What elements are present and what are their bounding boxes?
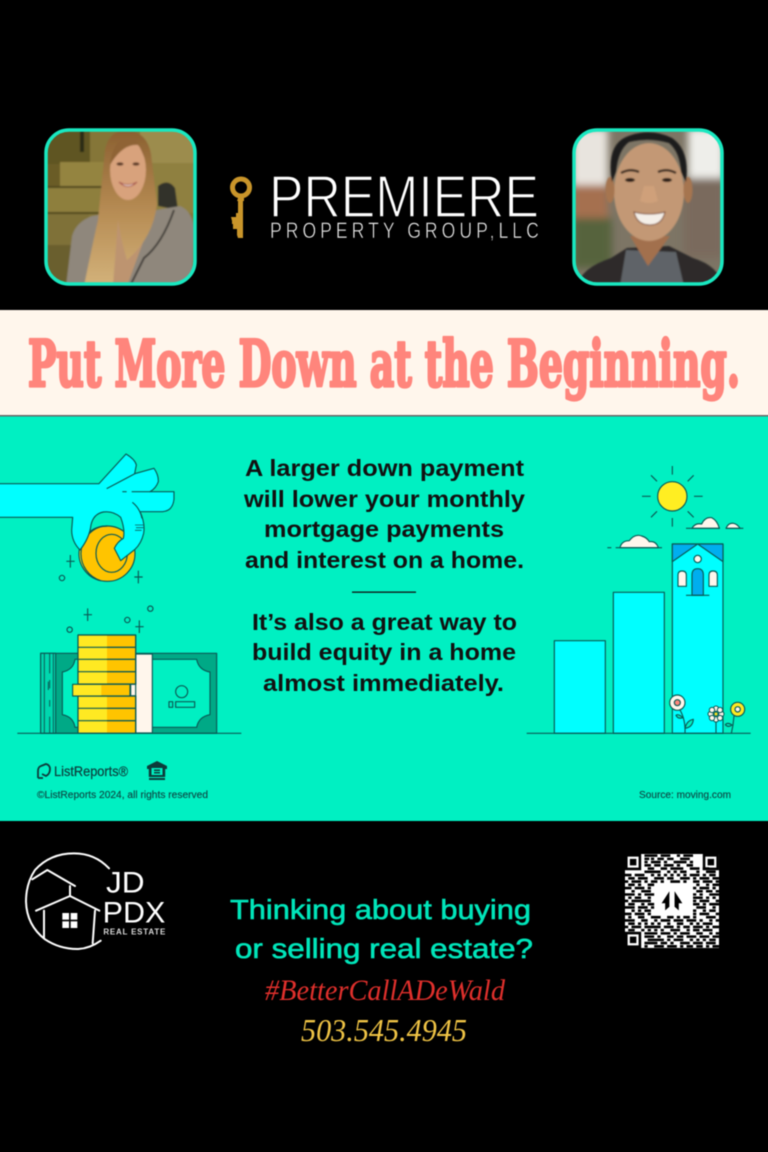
icon: gold coin [79, 526, 135, 581]
logo wordmark: PREMIERE: PREMIERE [269, 164, 539, 230]
body copy: down payment message: build equity in a home [252, 639, 516, 665]
QR code [625, 854, 719, 948]
photo: man agent [572, 128, 724, 286]
copyright line: ©ListReports 2024, all rights reserved [37, 790, 208, 801]
icon: clouds [607, 518, 743, 548]
wordmark: JD: JD [106, 867, 145, 900]
bar: medium [613, 592, 664, 733]
icon: flowers [670, 695, 745, 733]
body copy: down payment message: will lower your monthly [243, 486, 525, 512]
illustration: coin stack on dollar bill [17, 606, 241, 733]
illustration: hand dropping coin [0, 454, 174, 583]
white bill band [131, 654, 152, 733]
photo: woman agent [44, 128, 196, 287]
body copy: down payment message: It’s also a great way to [252, 609, 517, 635]
main teal panel [0, 416, 768, 821]
icon: equal housing logo [147, 761, 167, 780]
wordmark: Real Estate: REAL ESTATE [103, 927, 166, 936]
logo: JD PDX Real Estate [26, 853, 166, 949]
logo subtitle: Property Group, LLC: PROPERTY GROUP,LLC [270, 219, 539, 244]
icon: sun [642, 466, 703, 527]
hashtag: #BetterCallADeWald [265, 974, 506, 1007]
body copy: down payment message [243, 455, 525, 696]
bar: small [554, 641, 605, 733]
body copy: down payment message: and interest on a home. [245, 547, 524, 573]
body copy: down payment message: mortgage payments [264, 516, 504, 542]
title banner [0, 310, 768, 416]
icon: dollar bill [41, 653, 217, 733]
icon: QR center arrows [662, 891, 682, 910]
black header background [0, 0, 768, 310]
body copy: down payment message: A larger down payment [245, 455, 524, 481]
sparkles above stack [67, 606, 153, 633]
logo: Premiere Property Group [231, 164, 539, 244]
icon: ListReports mark [38, 764, 50, 778]
bar: tall house [672, 544, 723, 733]
body copy: down payment message: almost immediately. [263, 670, 504, 696]
icon: gold key [231, 179, 250, 238]
brand: ListReports logo: ListReports® [54, 763, 129, 779]
illustration: rising bars with house and sun [527, 466, 751, 733]
icon: house in circle [26, 853, 109, 949]
headline: thinking about buying or selling: or selling real estate? [235, 933, 533, 964]
gold coin stack [73, 635, 136, 733]
call to action text [230, 894, 533, 1048]
sparkles around coin [59, 555, 143, 583]
source line: Source: moving.com [639, 790, 731, 801]
phone number: 503.545.4945 [301, 1012, 467, 1048]
headline: thinking about buying or selling [230, 894, 533, 964]
headline: thinking about buying or selling: Thinking about buying [230, 894, 531, 925]
wordmark: PDX: PDX [103, 897, 165, 930]
